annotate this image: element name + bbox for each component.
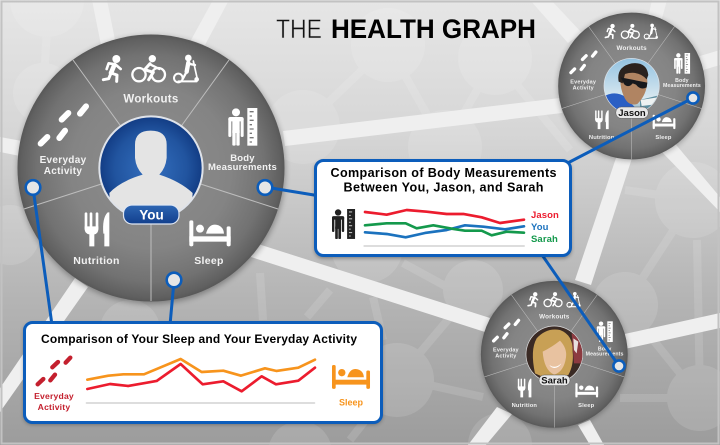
legend — [531, 210, 559, 245]
wheel labels: You: Sleep — [194, 255, 224, 267]
icon: body and ruler — [332, 209, 355, 239]
node: You Sleep — [167, 273, 181, 287]
node: Jason Body Measurements — [687, 92, 699, 104]
wheel labels: Sarah: Activity — [495, 354, 517, 360]
heading: Between You, Jason, and Sarah — [344, 180, 544, 194]
line chart: body measurements — [364, 210, 524, 246]
heading: Comparison of Body Measurements — [330, 166, 556, 180]
icon: bed — [332, 365, 370, 389]
icon: footprints — [38, 358, 70, 384]
node: You Body Measurements — [258, 180, 272, 195]
wheel labels: Sarah: Everyday — [493, 348, 520, 354]
wheel labels: Sarah: Nutrition — [512, 403, 537, 409]
connector: Jason Body Measurements to comparison box — [560, 98, 693, 167]
title: THE — [276, 14, 322, 44]
badge: You — [124, 205, 179, 224]
legend: You — [531, 222, 549, 233]
label: Everyday Activity — [34, 391, 74, 412]
wheel labels: You: Body — [230, 153, 255, 164]
badge: Sarah: Sarah — [541, 376, 568, 387]
node: Sarah Body Measurements — [613, 360, 625, 372]
panel: You wheel — [18, 34, 286, 304]
wheel labels: Sarah: Measurements — [586, 351, 624, 357]
wheel labels: Jason: Measurements — [663, 83, 701, 89]
wheel labels: Sarah: Workouts — [539, 313, 570, 320]
wheel labels: Sarah — [493, 313, 624, 409]
connector: Sleep to comparison box — [170, 281, 174, 325]
avatar: You — [98, 115, 204, 212]
connector: Sarah Body Measurements to comparison box — [540, 252, 619, 366]
connector: Body Measurements to comparison box — [265, 187, 320, 196]
connector: Everyday Activity to comparison box — [33, 188, 52, 325]
photo: Sarah — [526, 326, 583, 378]
label: Everyday Activity: Activity — [38, 402, 70, 412]
heading — [330, 166, 556, 194]
wheel labels: Jason: Body — [675, 78, 689, 84]
title: HEALTH GRAPH — [331, 14, 536, 44]
panel: sleep and everyday activity comparison — [24, 322, 382, 424]
wheel labels: You: Activity — [44, 166, 82, 177]
legend: Jason — [531, 210, 559, 221]
wheel labels: You — [40, 94, 277, 267]
wheel labels: Sarah: Body — [598, 346, 611, 352]
badge: Jason: Jason — [618, 108, 646, 119]
wheel labels: Jason: Nutrition — [589, 135, 615, 141]
wheel labels: You: Workouts — [123, 94, 179, 106]
node: You Everyday Activity — [26, 180, 40, 195]
wheel labels: You: Measurements — [208, 162, 277, 173]
heading: Comparison of Your Sleep and Your Everyday Activity — [41, 332, 357, 346]
panel: Sarah wheel — [481, 281, 628, 429]
photo: Jason — [604, 58, 660, 110]
wheel labels: Jason: Activity — [573, 85, 595, 91]
panel: body measurements comparison — [315, 160, 571, 258]
label: Everyday Activity: Everyday — [34, 391, 74, 401]
wheel labels: Jason: Workouts — [616, 45, 647, 52]
wheel labels: You: Nutrition — [73, 255, 120, 267]
wheel labels: You: Everyday — [40, 155, 87, 166]
wheel labels: Jason — [570, 45, 701, 141]
badge: You: You — [139, 208, 164, 222]
panel: Jason wheel — [558, 13, 705, 161]
legend: Sarah — [531, 234, 558, 245]
line chart: sleep vs activity — [87, 359, 315, 403]
label: Sleep: Sleep — [339, 398, 364, 408]
wheel labels: Jason: Everyday — [570, 79, 597, 85]
wheel labels: Jason: Sleep — [655, 135, 672, 141]
wheel labels: Sarah: Sleep — [578, 403, 595, 409]
